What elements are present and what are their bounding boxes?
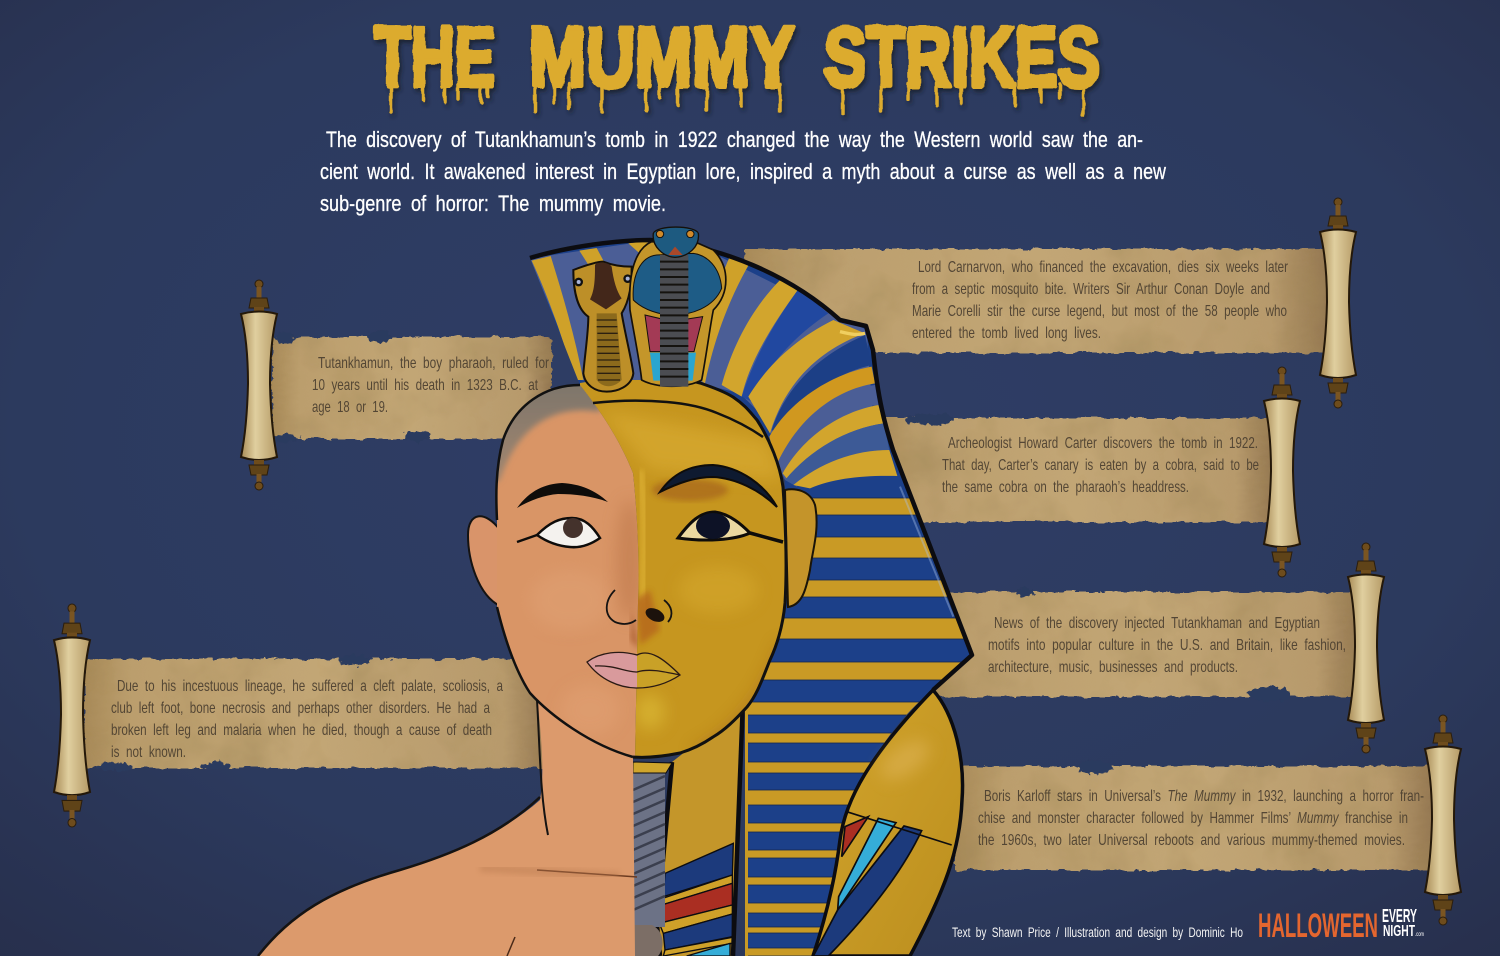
panel: scroll Carter: the same cobra on the pharaoh’s headdress. <box>942 479 1189 496</box>
panel: scroll Karloff: Boris Karloff stars in Universal’s The Mummy in 1932, launching a horror fran- <box>984 788 1424 805</box>
lips <box>587 652 680 688</box>
logo: Halloween Every Night: .com <box>1415 932 1424 938</box>
title <box>374 10 1100 115</box>
panel: scroll Tutankhamun <box>241 280 552 490</box>
neck collar and lappet <box>633 700 745 956</box>
intro text: The discovery of Tutankhamun’s tomb in 1922 changed the way the Western world saw the an- <box>326 127 1143 152</box>
illustration: pharaoh half man half mask <box>258 227 1000 956</box>
panel: scroll lineage: is not known. <box>111 744 186 761</box>
panel: scroll popular culture: motifs into popular culture in the U.S. and Britain, like fashion, <box>988 637 1346 654</box>
nose <box>607 590 671 625</box>
panel: scroll Carter <box>880 367 1300 577</box>
credit line: Text by Shawn Price / Illustration and design by Dominic Ho <box>952 925 1243 940</box>
headdress stripes <box>520 230 1000 956</box>
panel: scroll Tutankhamun: 10 years until his death in 1323 B.C. at <box>312 377 538 394</box>
title: THE <box>374 10 495 104</box>
shoulder and arm band <box>813 690 963 956</box>
panel: scroll lineage: Due to his incestuous lineage, he suffered a cleft palate, scoliosis, a <box>117 678 503 695</box>
gold ear <box>785 489 817 607</box>
intro text: cient world. It awakened interest in Egyptian lore, inspired a myth about a curse as well as a new <box>320 159 1167 184</box>
intro text: sub-genre of horror: The mummy movie. <box>320 191 666 216</box>
crown band line <box>593 401 763 437</box>
headdress outline <box>530 240 972 690</box>
logo: Halloween Every Night: HALLOWEEN <box>1258 907 1378 945</box>
panel: scroll Karloff: chise and monster character followed by Hammer Films’ Mummy franchise in <box>978 810 1408 827</box>
panel: scroll lineage: broken left leg and malaria when he died, though a cause of death <box>111 722 492 739</box>
panel: scroll lineage: club left foot, bone necrosis and perhaps other disorders. He had a <box>111 700 490 717</box>
panel: scroll Carter: That day, Carter’s canary is eaten by a cobra, said to be <box>942 457 1259 474</box>
human head outline <box>496 385 633 757</box>
title: MUMMY <box>529 10 795 104</box>
cobra <box>630 227 726 387</box>
panel: scroll Carnarvon: Lord Carnarvon, who financed the excavation, dies six weeks later <box>918 259 1288 276</box>
human eye and brow <box>517 483 608 547</box>
panel: scroll Carnarvon: Marie Corelli stir the curse legend, but most of the 58 people who <box>912 303 1287 320</box>
panel: scroll lineage <box>54 604 550 827</box>
panel: scroll popular culture: News of the discovery injected Tutankhaman and Egyptian <box>994 615 1320 632</box>
gold eye and brow <box>660 465 783 542</box>
panel: scroll popular culture <box>925 543 1384 753</box>
panel: scroll Carnarvon: from a septic mosquito bite. Writers Sir Arthur Conan Doyle and <box>912 281 1270 298</box>
panel: scroll Tutankhamun: age 18 or 19. <box>312 399 388 416</box>
panel: scroll Tutankhamun: Tutankhamun, the boy pharaoh, ruled for <box>318 355 549 372</box>
human half of face <box>497 385 638 756</box>
logo: Halloween Every Night: NIGHT <box>1383 923 1415 940</box>
panel: scroll Karloff <box>955 715 1461 925</box>
vulture head <box>573 262 633 392</box>
human body <box>258 697 637 956</box>
title: STRIKES <box>824 10 1100 104</box>
intro text <box>320 127 1167 216</box>
logo: Halloween Every Night: EVERY <box>1382 906 1417 926</box>
panel: scroll Carter: Archeologist Howard Carter discovers the tomb in 1922. <box>948 435 1258 452</box>
gold half of face <box>580 380 785 756</box>
panel: scroll popular culture: architecture, music, businesses and products. <box>988 659 1238 676</box>
human ear <box>468 516 500 606</box>
gold crown outline <box>633 380 786 757</box>
panel: scroll Carnarvon <box>745 198 1356 408</box>
panel: scroll Carnarvon: entered the tomb lived long lives. <box>912 325 1101 342</box>
